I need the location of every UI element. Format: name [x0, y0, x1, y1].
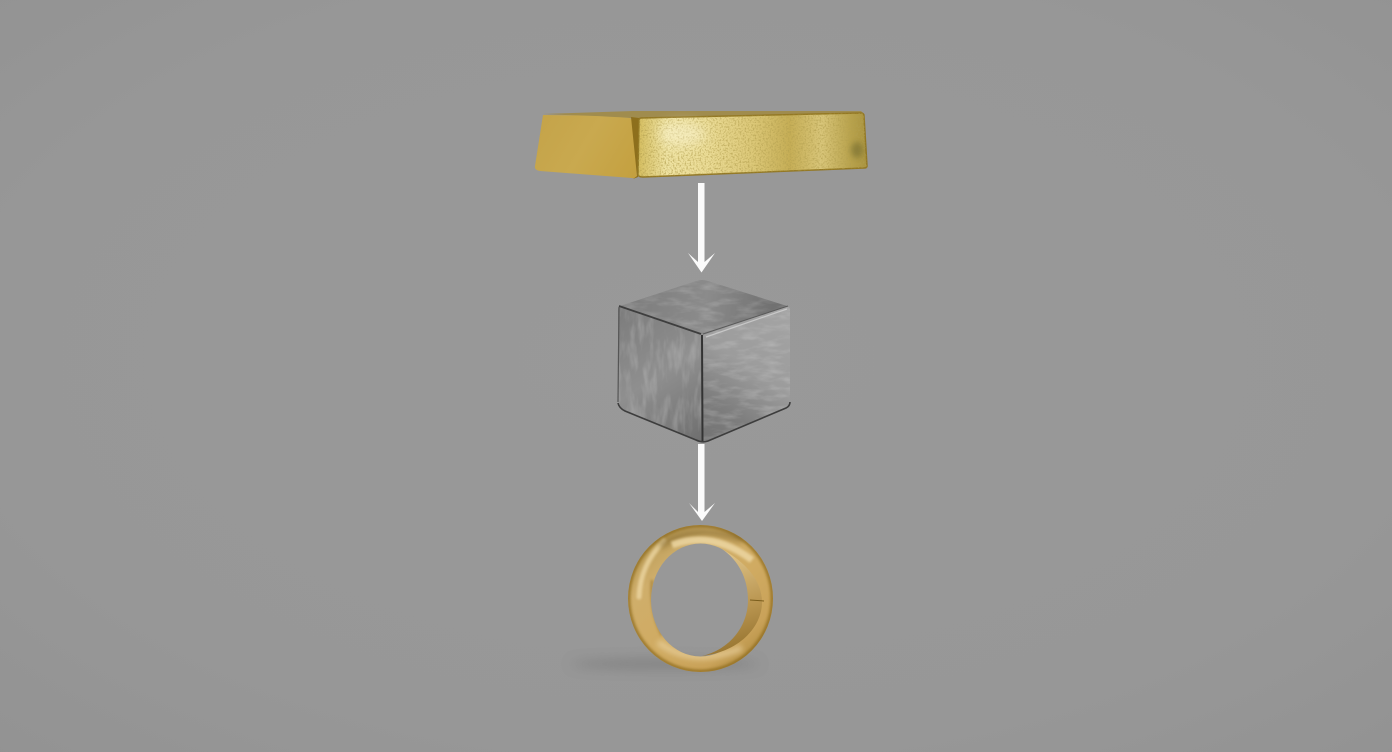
arrow: cube to ring	[689, 444, 715, 521]
bar left end face	[535, 115, 637, 178]
silver cube	[618, 280, 790, 442]
ring inner band	[702, 549, 762, 656]
gold bar	[535, 111, 867, 179]
infographic: gold bar alloyed into ring	[534, 111, 868, 672]
ground shadow	[570, 660, 760, 668]
ring outer shading	[628, 526, 772, 672]
bar top face	[543, 111, 864, 118]
arrow: bar to cube	[688, 183, 715, 272]
cube left face	[618, 306, 702, 441]
cube top face	[620, 280, 787, 335]
ring left inner shade	[652, 580, 662, 635]
cube edges	[619, 306, 701, 334]
ring seam	[750, 600, 764, 601]
cube right face	[703, 307, 790, 442]
bar corner edge	[631, 117, 639, 179]
ring top dark band	[660, 532, 742, 546]
bar highlight	[658, 122, 706, 146]
ring left highlight	[639, 541, 664, 597]
ring top highlight	[672, 540, 752, 560]
ring lower highlight	[658, 642, 742, 657]
bar front face	[638, 113, 867, 177]
bar shadow patch	[851, 142, 863, 158]
gold ring	[628, 525, 773, 672]
ring body	[628, 525, 773, 672]
